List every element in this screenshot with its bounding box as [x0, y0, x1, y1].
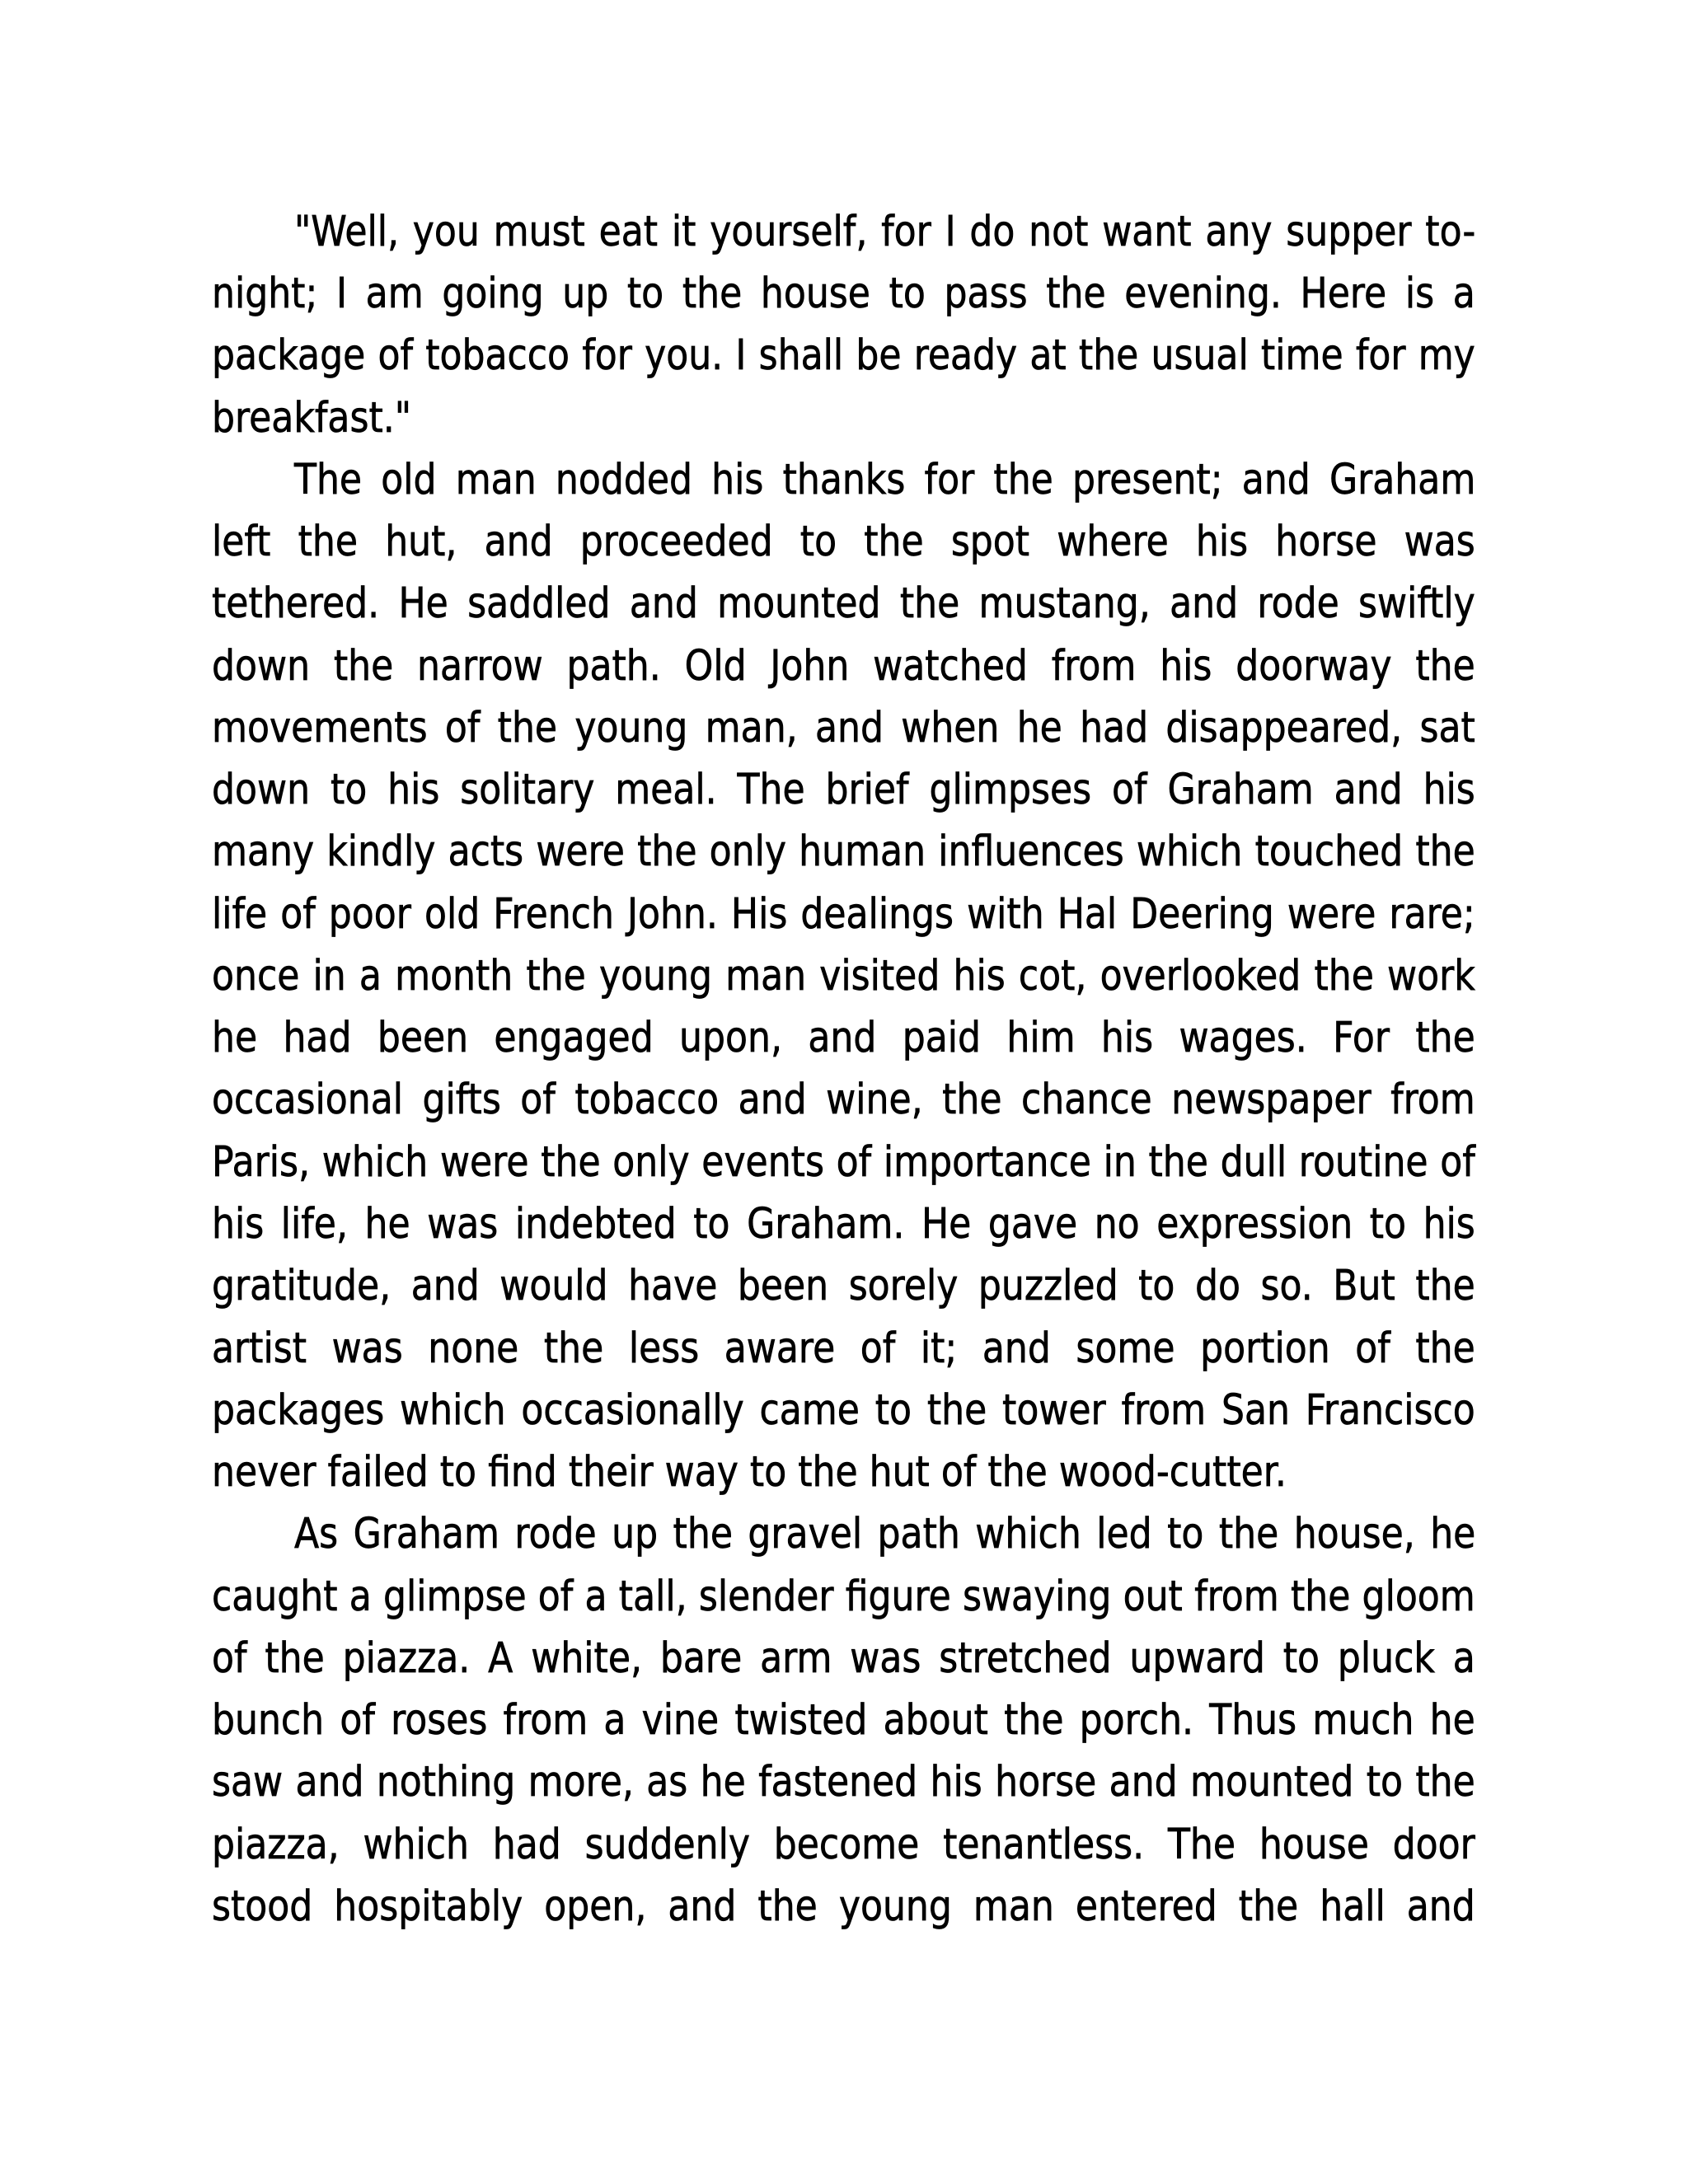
paragraph 2: movements of the young man, and when he had disappeared, sat [212, 704, 1475, 752]
paragraph 1: "Well, you must eat it yourself, for I do not want any supper to- [294, 208, 1475, 256]
paragraph 2: many kindly acts were the only human influences which touched the [212, 827, 1475, 876]
paragraph 3: piazza, which had suddenly become tenantless. The house door [212, 1821, 1475, 1869]
paragraph 1: breakfast." [212, 394, 411, 443]
paragraph 2: The old man nodded his thanks for the present; and Graham [294, 456, 1475, 504]
paragraph 1: package of tobacco for you. I shall be ready at the usual time for my [212, 331, 1475, 380]
paragraph 2: occasional gifts of tobacco and wine, the chance newspaper from [212, 1076, 1475, 1124]
paragraph 2: packages which occasionally came to the tower from San Francisco [212, 1386, 1475, 1435]
paragraph 3: bunch of roses from a vine twisted about the porch. Thus much he [212, 1696, 1475, 1745]
paragraph 2: gratitude, and would have been sorely puzzled to do so. But the [212, 1262, 1475, 1310]
paragraph 3: of the piazza. A white, bare arm was stretched upward to pluck a [212, 1634, 1475, 1683]
paragraph 2: never failed to find their way to the hut of the wood-cutter. [212, 1448, 1287, 1497]
paragraph 2: his life, he was indebted to Graham. He gave no expression to his [212, 1200, 1475, 1249]
paragraph 2: Paris, which were the only events of importance in the dull routine of [212, 1138, 1475, 1187]
paragraph 2: down the narrow path. Old John watched from his doorway the [212, 642, 1475, 691]
paragraph 3: saw and nothing more, as he fastened his horse and mounted to the [212, 1758, 1475, 1807]
paragraph 1: night; I am going up to the house to pass the evening. Here is a [212, 269, 1475, 318]
paragraph 2: he had been engaged upon, and paid him his wages. For the [212, 1014, 1475, 1062]
paragraph 2: life of poor old French John. His dealings with Hal Deering were rare; [212, 890, 1475, 939]
paragraph 2: tethered. He saddled and mounted the mustang, and rode swiftly [212, 579, 1475, 628]
paragraph 3: As Graham rode up the gravel path which led to the house, he [294, 1510, 1475, 1558]
paragraph 2: artist was none the less aware of it; and some portion of the [212, 1324, 1475, 1373]
paragraph 2: once in a month the young man visited his cot, overlooked the work [212, 952, 1475, 1001]
paragraph 2: left the hut, and proceeded to the spot where his horse was [212, 518, 1475, 566]
paragraph 2: down to his solitary meal. The brief glimpses of Graham and his [212, 766, 1475, 814]
paragraph 3: stood hospitably open, and the young man entered the hall and [212, 1882, 1475, 1931]
paragraph 3: caught a glimpse of a tall, slender figure swaying out from the gloom [212, 1572, 1475, 1621]
